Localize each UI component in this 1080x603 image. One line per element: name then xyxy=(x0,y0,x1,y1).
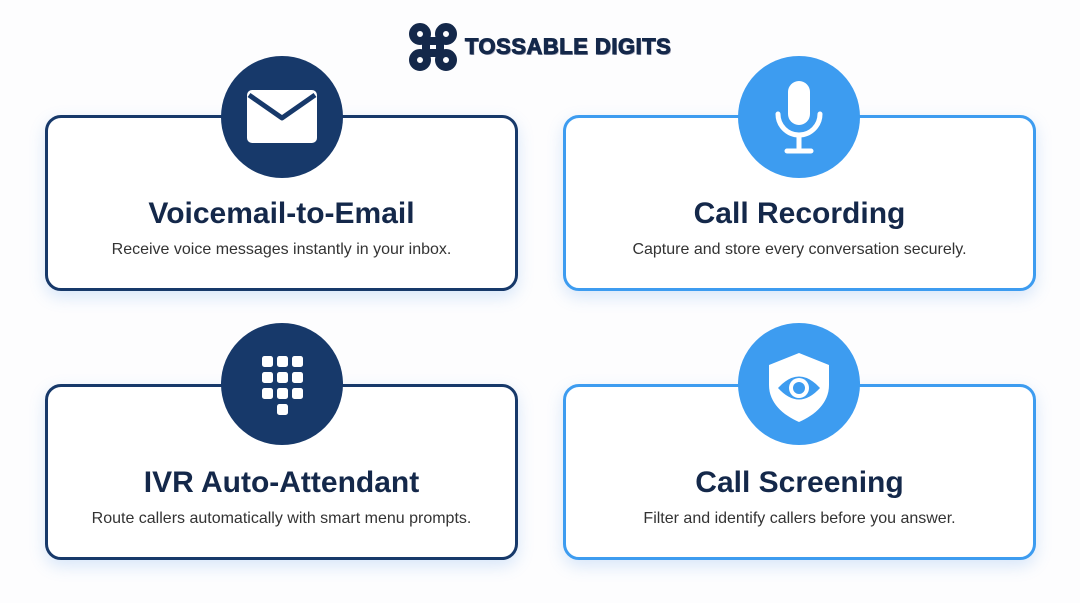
heading: Call Recording xyxy=(694,197,905,230)
heading: Voicemail-to-Email xyxy=(148,197,415,230)
heading: Call Screening xyxy=(695,466,904,499)
heading: IVR Auto-Attendant xyxy=(144,466,419,499)
icon: command symbol xyxy=(409,23,457,71)
text block: Filter and identify callers before you answer. xyxy=(643,510,956,527)
panel: ivr auto-attendant xyxy=(45,384,518,560)
logo xyxy=(409,23,671,71)
icon: shield eye xyxy=(738,323,860,445)
logo text: TOSSABLE DIGITS xyxy=(465,34,671,59)
text block: Receive voice messages instantly in your inbox. xyxy=(112,241,451,258)
text block: Route callers automatically with smart menu prompts. xyxy=(92,510,471,527)
icon: envelope xyxy=(221,56,343,178)
icon: microphone xyxy=(738,56,860,178)
panel: call recording xyxy=(563,115,1036,291)
text block: Capture and store every conversation securely. xyxy=(632,241,967,258)
icon: keypad xyxy=(221,323,343,445)
panel: call screening xyxy=(563,384,1036,560)
panel: voicemail-to-email xyxy=(45,115,518,291)
